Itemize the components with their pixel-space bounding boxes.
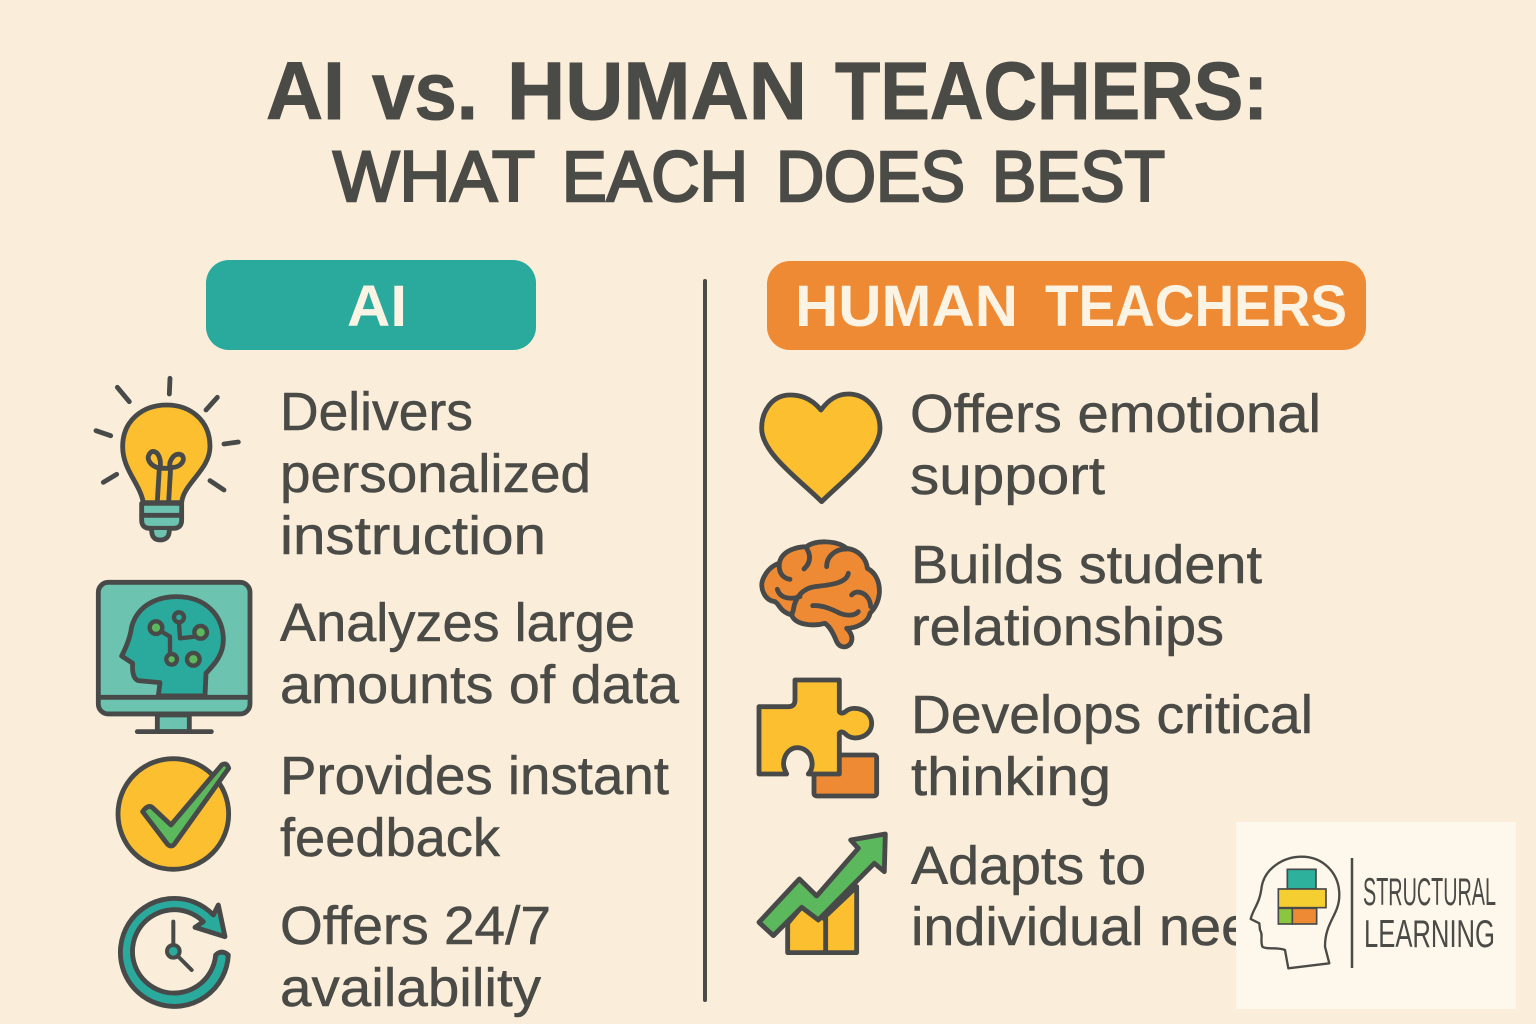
title: BEST — [992, 138, 1165, 217]
text: offers 24/7 availability — [280, 896, 551, 1018]
text: analyzes large amounts of data: Analyzes large — [280, 593, 635, 653]
title — [266, 46, 1268, 217]
icon: head with blocks — [1251, 857, 1339, 968]
text: adapts to individual needs: individual needs — [911, 897, 1311, 957]
icon: monitor with AI head — [98, 582, 250, 732]
panel: human teachers — [759, 261, 1366, 957]
icon: puzzle pieces — [759, 680, 877, 796]
text: adapts to individual needs — [911, 836, 1311, 957]
title: WHAT — [333, 138, 535, 217]
text: offers emotional support — [910, 384, 1321, 506]
text: delivers personalized instruction — [280, 382, 591, 566]
text: delivers personalized instruction: Delivers — [280, 382, 473, 442]
logo: structural learning — [1236, 822, 1516, 1009]
heading: AI badge — [206, 260, 536, 350]
heading: human teachers badge: TEACHERS — [1045, 274, 1347, 339]
text: delivers personalized instruction: personalized — [280, 444, 591, 504]
icon: clock with arrow — [120, 898, 228, 1006]
text: offers emotional support: support — [910, 446, 1105, 506]
text: analyzes large amounts of data: amounts of data — [280, 655, 680, 715]
heading: human teachers badge: HUMAN — [795, 274, 1018, 339]
text: develops critical thinking: Develops critical — [911, 685, 1313, 745]
text: builds student relationships: Builds student — [911, 535, 1262, 595]
panel: AI — [96, 260, 680, 1018]
text: provides instant feedback: feedback — [280, 808, 501, 868]
text: delivers personalized instruction: instruction — [280, 506, 546, 566]
title: EACH — [562, 138, 748, 217]
icon: growth chart arrow — [759, 834, 885, 953]
heading: AI badge: AI — [347, 274, 407, 339]
title: vs. — [372, 46, 478, 137]
text: provides instant feedback: Provides instant — [280, 746, 669, 806]
text: develops critical thinking: thinking — [911, 747, 1111, 807]
icon: brain — [762, 542, 879, 647]
text: builds student relationships: relationships — [911, 597, 1224, 657]
title: TEACHERS: — [835, 46, 1268, 137]
title: HUMAN — [507, 46, 807, 137]
text: builds student relationships — [911, 535, 1262, 657]
icon: heart — [762, 394, 880, 502]
title: AI — [266, 46, 345, 137]
text: offers 24/7 availability: availability — [280, 958, 541, 1018]
icon: check mark — [118, 759, 229, 869]
text: offers emotional support: Offers emotional — [910, 384, 1321, 444]
text: analyzes large amounts of data — [280, 593, 680, 715]
icon: light bulb — [96, 378, 238, 540]
heading: human teachers badge — [767, 261, 1366, 350]
title: DOES — [776, 138, 965, 217]
text: adapts to individual needs: Adapts to — [911, 836, 1146, 896]
text: develops critical thinking — [911, 685, 1313, 807]
text: offers 24/7 availability: Offers 24/7 — [280, 896, 551, 956]
center divider — [703, 281, 707, 1000]
text: provides instant feedback — [280, 746, 669, 868]
